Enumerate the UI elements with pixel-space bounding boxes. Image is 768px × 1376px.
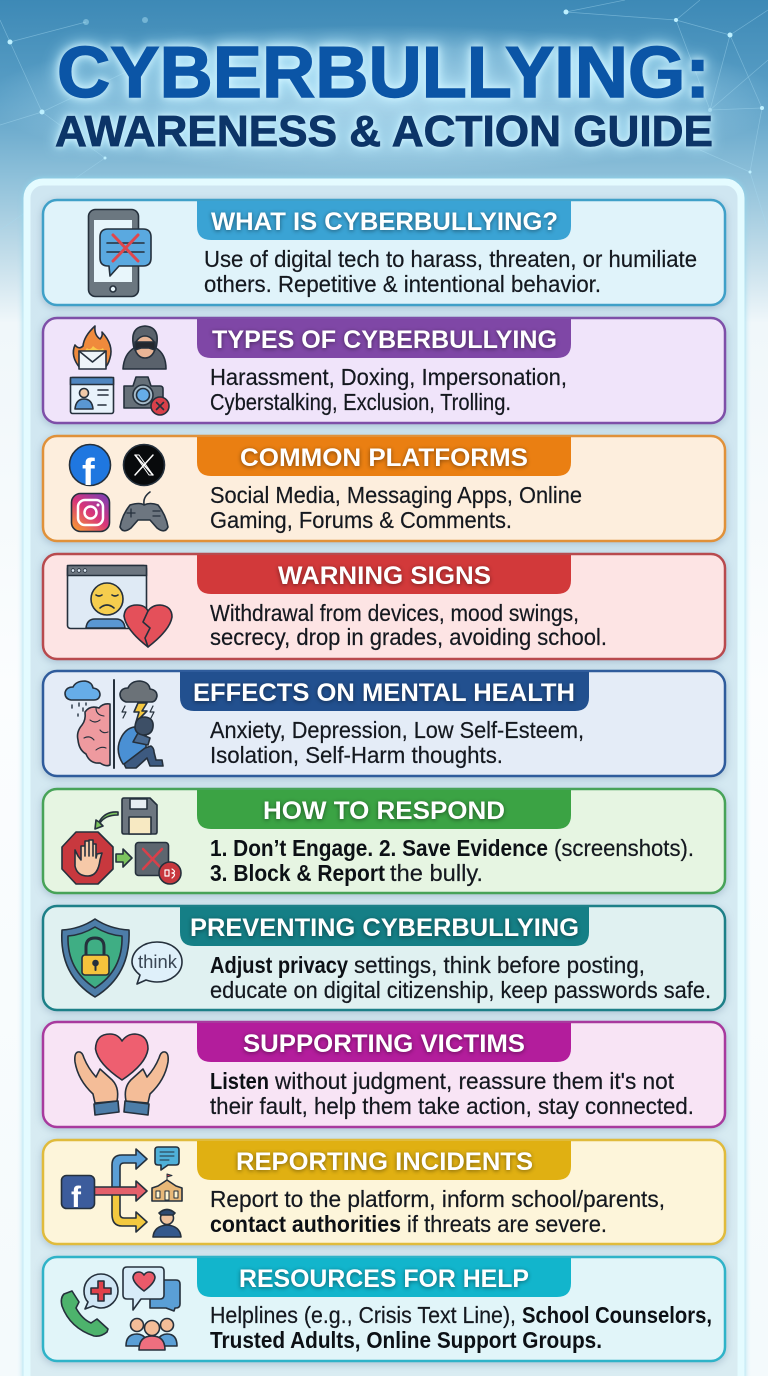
body text	[204, 246, 697, 297]
body text	[210, 364, 567, 415]
icons: report flow to chat, school, police: f	[71, 1181, 82, 1214]
card: supporting victims	[43, 1022, 725, 1127]
heading tab	[197, 1258, 571, 1297]
body text: if threats are severe.	[407, 1211, 607, 1237]
body text: secrecy, drop in grades, avoiding school.	[210, 624, 607, 650]
body text	[210, 952, 711, 1003]
body text	[210, 482, 582, 533]
body text: Listen	[210, 1068, 269, 1094]
body text: Withdrawal from devices, mood swings,	[210, 600, 579, 626]
icon: think bubble	[132, 942, 182, 984]
body text: their fault, help them take action, stay connected.	[210, 1093, 694, 1119]
heading tab	[197, 437, 571, 476]
body text: Trusted Adults, Online Support Groups.	[210, 1327, 602, 1353]
heading: TYPES OF CYBERBULLYING	[212, 326, 557, 354]
icon: X	[124, 444, 164, 486]
icon: hands holding heart	[75, 1034, 168, 1115]
icon: clouds, brain and sad person	[65, 680, 163, 768]
body text: Cyberstalking, Exclusion, Trolling.	[210, 389, 511, 415]
body text: Anxiety, Depression, Low Self-Esteem,	[210, 717, 584, 743]
heading: COMMON PLATFORMS	[240, 444, 528, 472]
card: how to respond	[43, 789, 725, 893]
card: effects on mental health	[43, 671, 725, 776]
heading: WARNING SIGNS	[278, 562, 491, 590]
heading: REPORTING INCIDENTS	[236, 1148, 533, 1176]
body text	[210, 835, 694, 886]
body text: the bully.	[390, 860, 483, 886]
heading tab	[197, 790, 571, 829]
body text	[210, 600, 607, 650]
body text: settings, think before posting,	[354, 952, 645, 978]
card: warning signs	[43, 554, 725, 659]
icon: instagram	[72, 494, 110, 532]
card: common platforms	[43, 436, 725, 541]
body text	[210, 717, 584, 768]
title	[55, 33, 713, 156]
heading tab	[197, 1023, 571, 1062]
card: what is cyberbullying	[43, 200, 725, 305]
heading tab	[180, 907, 589, 946]
heading tab	[197, 201, 571, 240]
heading tab	[180, 672, 589, 711]
heading: PREVENTING CYBERBULLYING	[190, 914, 579, 942]
icon: think bubble: think	[138, 952, 178, 972]
title: CYBERBULLYING:	[57, 33, 710, 113]
body text: Social Media, Messaging Apps, Online	[210, 482, 582, 508]
icon: phone with blocked message	[88, 210, 151, 296]
icons: report flow to chat, school, police	[62, 1147, 182, 1237]
heading tab	[197, 1141, 571, 1180]
body text: 3. Block & Report	[210, 860, 385, 886]
body text: School Counselors,	[522, 1302, 712, 1328]
heading tab	[197, 319, 571, 358]
body text: Helplines (e.g., Crisis Text Line),	[210, 1302, 516, 1328]
heading tab	[197, 555, 571, 594]
body text: Gaming, Forums & Comments.	[210, 507, 512, 533]
heading: RESOURCES FOR HELP	[239, 1265, 529, 1293]
icon: facebook	[70, 444, 110, 494]
body text	[210, 1302, 712, 1353]
body text: Harassment, Doxing, Impersonation,	[210, 364, 567, 390]
heading: HOW TO RESPOND	[263, 797, 505, 825]
icon: game controller	[120, 492, 168, 531]
icons: phone, medical bubble, heart bubbles, people	[61, 1267, 180, 1350]
title: AWARENESS & ACTION GUIDE	[55, 107, 713, 156]
body text: (screenshots).	[554, 835, 694, 861]
body text: Report to the platform, inform school/parents,	[210, 1186, 665, 1212]
icon: facebook: f	[82, 452, 95, 494]
heading: SUPPORTING VICTIMS	[243, 1030, 525, 1058]
card: preventing cyberbullying	[43, 906, 725, 1010]
body text: contact authorities	[210, 1211, 401, 1237]
icon: shield with lock	[62, 919, 129, 997]
card: resources for help	[43, 1257, 725, 1361]
icon: sad face window and broken heart	[68, 566, 172, 647]
body text: 1. Don’t Engage. 2. Save Evidence	[210, 835, 548, 861]
icons: save, stop hand, block	[62, 798, 181, 884]
body text	[210, 1186, 665, 1237]
heading: EFFECTS ON MENTAL HEALTH	[193, 679, 575, 707]
icons: flame mail, hacker, id card, camera	[70, 326, 169, 415]
body text: without judgment, reassure them it's not	[274, 1068, 675, 1094]
body text: Isolation, Self-Harm thoughts.	[210, 742, 503, 768]
card: types of cyberbullying	[43, 318, 725, 423]
body text: educate on digital citizenship, keep passwords safe.	[210, 977, 711, 1003]
body text: others. Repetitive & intentional behavior.	[204, 271, 601, 297]
body text: Adjust privacy	[210, 952, 348, 978]
card: reporting incidents	[43, 1140, 725, 1244]
heading: WHAT IS CYBERBULLYING?	[211, 208, 558, 236]
body text	[210, 1068, 694, 1119]
body text: Use of digital tech to harass, threaten, or humiliate	[204, 246, 697, 272]
